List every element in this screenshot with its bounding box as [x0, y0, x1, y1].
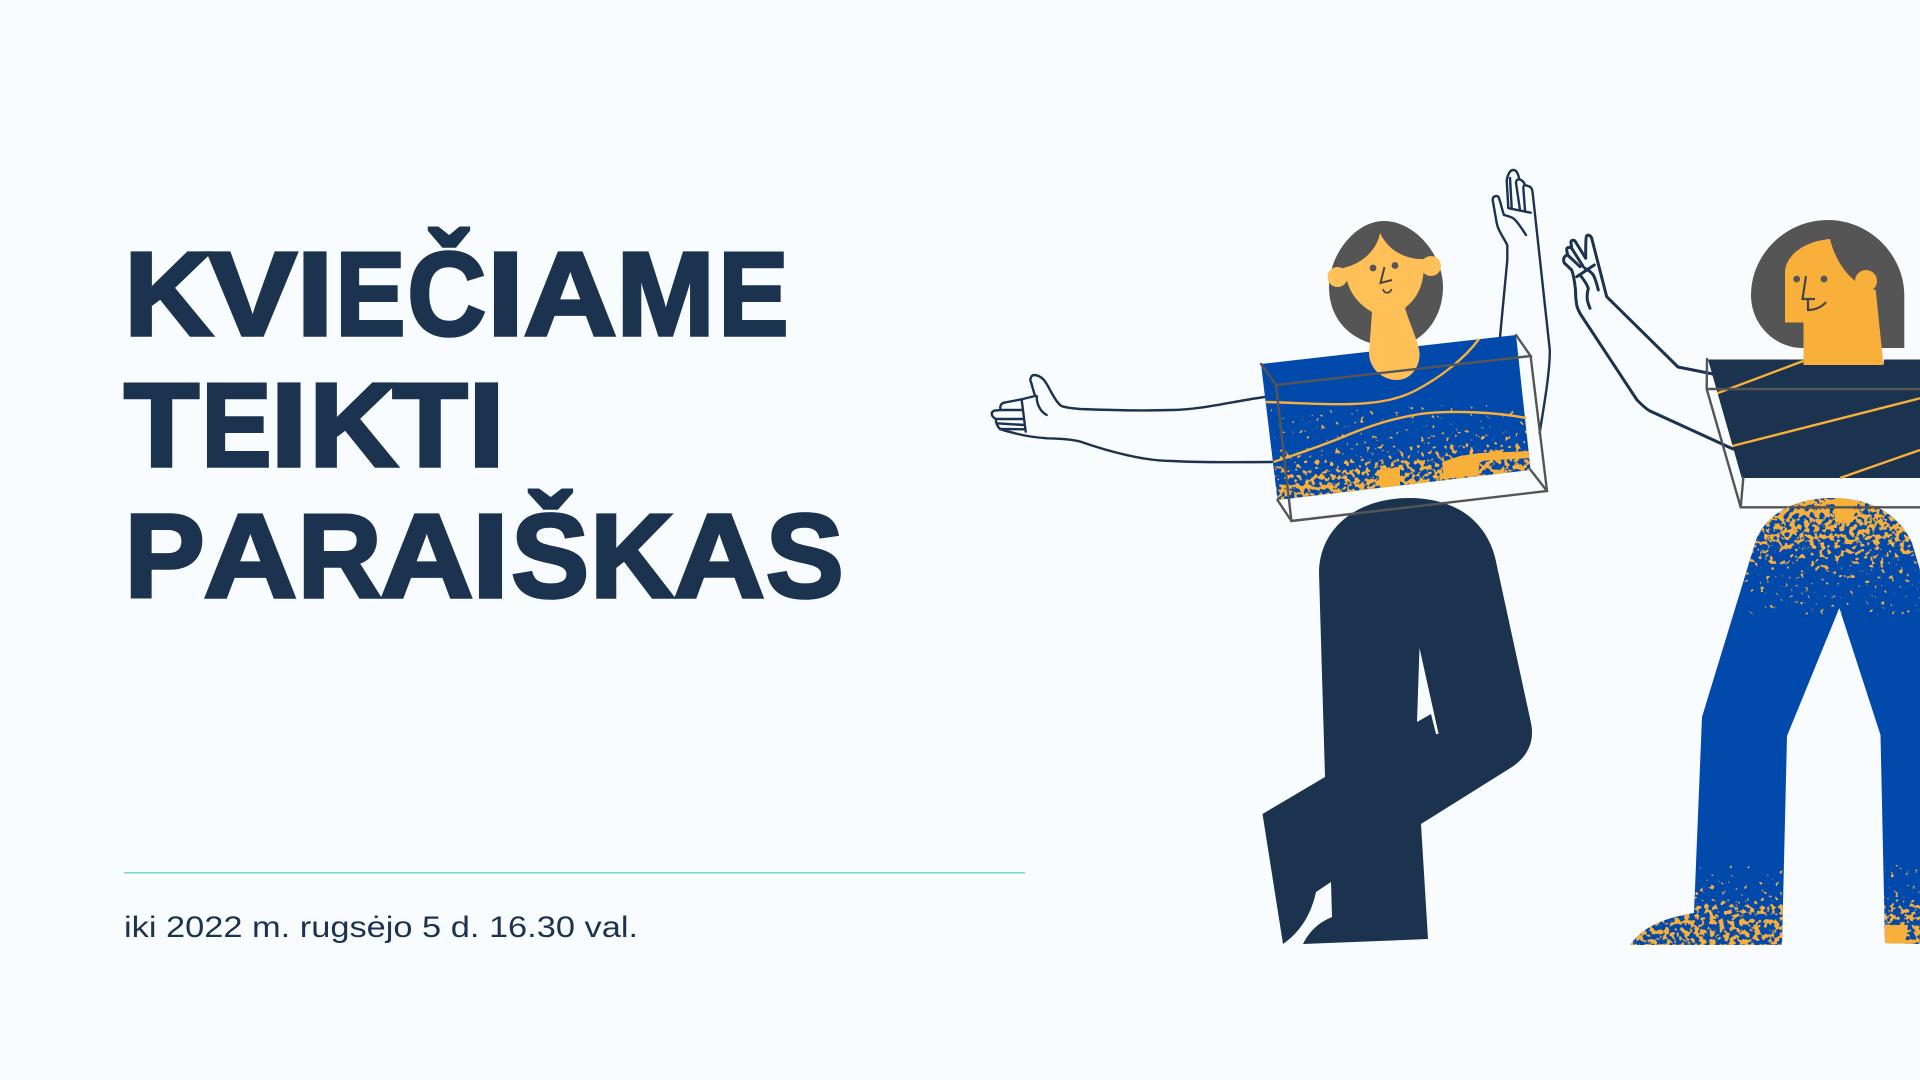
title: S	[766, 490, 844, 623]
title: I	[487, 228, 524, 361]
title: Č	[407, 228, 486, 361]
title: V	[208, 228, 297, 361]
right person shirt	[1708, 360, 1920, 478]
figure: left person	[992, 170, 1550, 944]
right person hair	[1751, 220, 1904, 348]
left person shirt	[1261, 335, 1531, 500]
title: A	[524, 228, 617, 361]
left person pants	[1262, 498, 1532, 944]
title: A	[380, 490, 474, 623]
title: K	[590, 490, 674, 623]
title: I	[468, 359, 505, 492]
right person arm	[1564, 235, 1733, 449]
title: E	[718, 228, 788, 361]
title: A	[204, 490, 297, 623]
left person wire box	[1261, 335, 1547, 521]
title: A	[674, 490, 765, 623]
left person raised arm	[1493, 170, 1550, 433]
figure: right person	[1564, 220, 1920, 950]
left person outstretched arm	[992, 375, 1272, 462]
title: M	[617, 228, 715, 361]
title	[124, 228, 844, 623]
title: T	[124, 359, 199, 492]
title: E	[202, 359, 271, 492]
right person face	[1785, 239, 1884, 365]
deadline text: iki 2022 m. rugsėjo 5 d. 16.30 val.	[124, 911, 638, 944]
title: E	[336, 228, 405, 361]
title: K	[124, 228, 213, 361]
title: T	[392, 359, 468, 492]
title: Š	[511, 490, 589, 623]
title: I	[472, 490, 509, 623]
title: I	[270, 359, 308, 492]
title: R	[298, 490, 382, 623]
title: P	[124, 490, 205, 623]
right person pants	[1625, 490, 1920, 950]
left person hair	[1329, 221, 1443, 343]
divider line	[124, 872, 1025, 874]
right person wire box	[1707, 359, 1920, 507]
left person shirt speckle	[1268, 405, 1530, 500]
title: I	[296, 228, 334, 361]
left person head and neck	[1328, 233, 1441, 380]
title: K	[309, 359, 398, 492]
left person shirt lines	[1266, 339, 1526, 462]
